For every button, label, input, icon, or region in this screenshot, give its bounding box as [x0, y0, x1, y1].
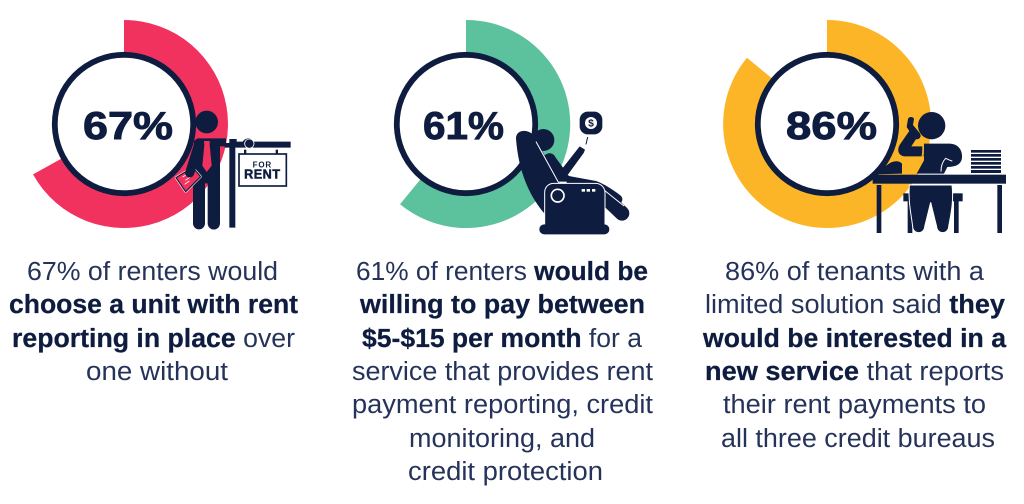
icon: person in massage chair with remote: $ [588, 119, 594, 130]
text: 86% finding: would be interested in a [702, 325, 1007, 353]
text: 61% finding: service that provides rent [352, 358, 653, 386]
text: 61% finding: credit protection [408, 458, 603, 486]
donut chart: 61%: 61% [423, 105, 504, 148]
icon: agent with for rent sign: FOR [253, 160, 272, 169]
text: 86% finding: their rent payments to [723, 391, 986, 419]
icon: person on phone at desk [873, 112, 1006, 233]
text: 61% finding: payment reporting, credit [352, 391, 653, 419]
text: 61% finding: $5-$15 per month for a [362, 325, 643, 353]
icon: agent with for rent sign [176, 111, 291, 229]
text: 61% finding: 61% of renters would be [356, 258, 648, 286]
donut chart: 86% [723, 20, 931, 228]
panel: 86% interested in new service [702, 20, 1007, 453]
panel: 61% willing to pay [352, 20, 653, 486]
text: 67% finding: reporting in place over [12, 325, 296, 353]
text: 67% finding: 67% of renters would [27, 258, 278, 286]
donut chart: 67% [33, 20, 228, 228]
text: 86% finding: 86% of tenants with a [725, 258, 985, 286]
text: 67% finding: choose a unit with rent [9, 291, 299, 319]
text: 86% finding: new service that reports [705, 358, 1004, 386]
text: 61% finding [352, 258, 653, 486]
donut chart: 61% [397, 20, 570, 228]
icon: agent with for rent sign: RENT [244, 167, 281, 181]
text: 86% finding: limited solution said they [705, 291, 1006, 319]
donut chart: 86%: 86% [786, 105, 877, 148]
text: 86% finding: all three credit bureaus [721, 425, 995, 453]
text: 67% finding [9, 258, 299, 386]
text: 86% finding [702, 258, 1007, 453]
donut chart: 67%: 67% [83, 105, 173, 148]
icon: person in massage chair with remote [516, 112, 624, 234]
panel: 67% choose a unit with rent reporting [9, 20, 299, 386]
text: 67% finding: one without [86, 358, 228, 386]
text: 61% finding: monitoring, and [409, 425, 595, 453]
text: 61% finding: willing to pay between [359, 291, 645, 319]
